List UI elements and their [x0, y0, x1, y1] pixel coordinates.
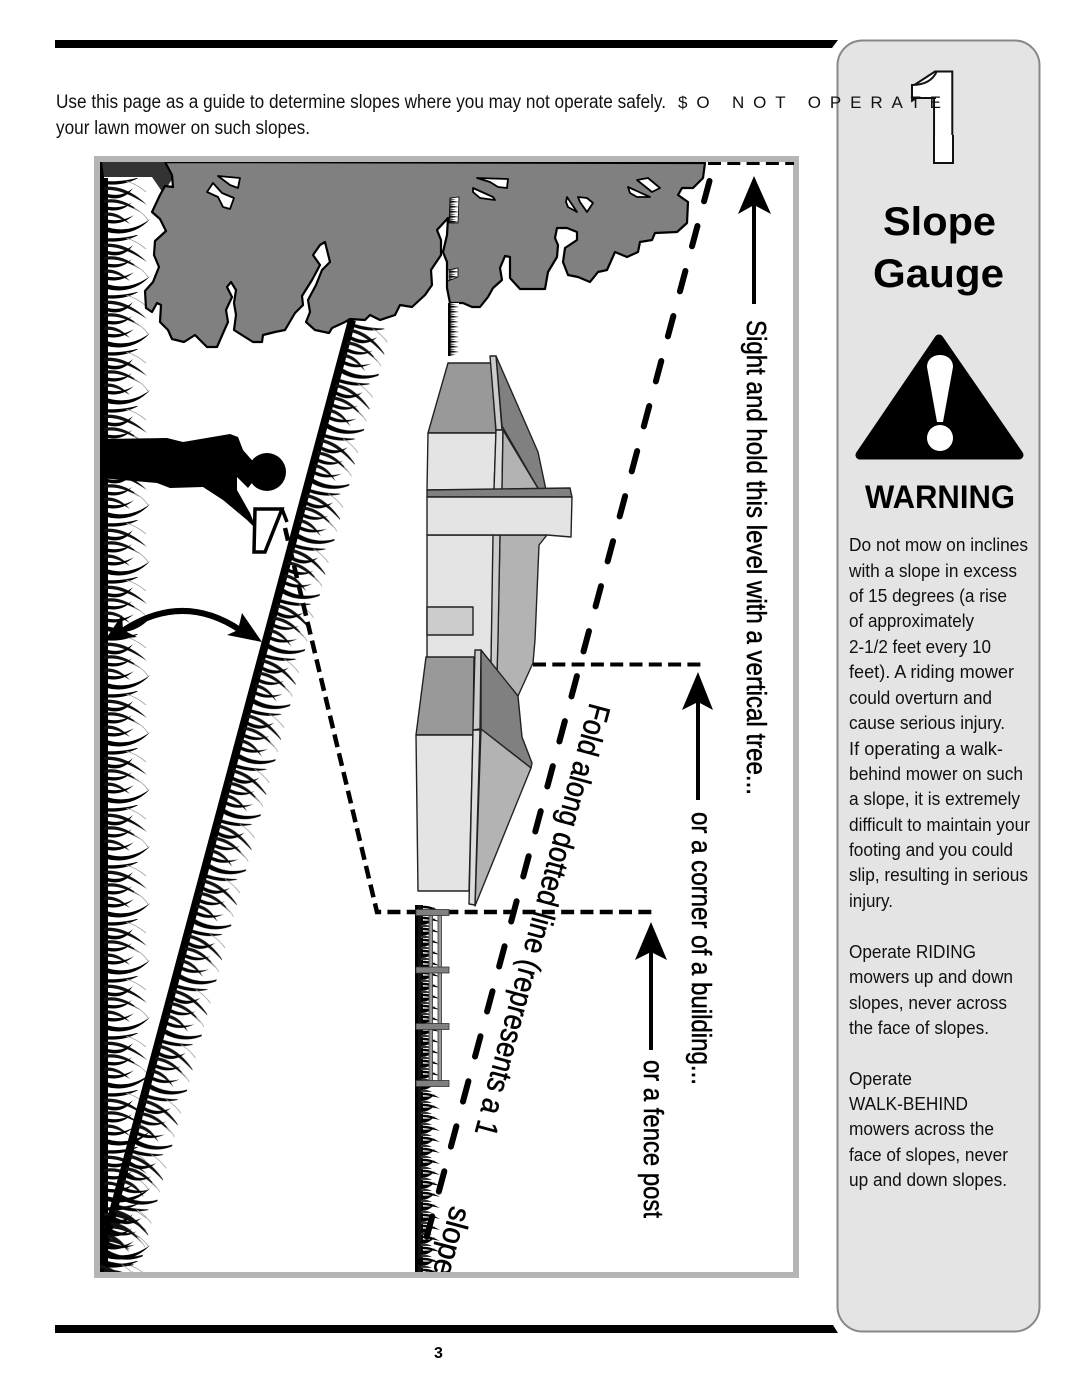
- page number: 3: [434, 1345, 443, 1362]
- sliver of grass behind tree: [448, 197, 459, 356]
- arrow: building corner: [682, 672, 713, 800]
- walk-behind mower instructions: face of slopes, never: [849, 1144, 1008, 1165]
- person silhouette: [100, 434, 286, 530]
- riding mower instructions: slopes, never across: [849, 992, 1007, 1013]
- intro text: Use this page as a guide to determine slopes where you may not operate safely.: [56, 92, 666, 113]
- numeral 1: [911, 70, 954, 164]
- icon: warning triangle: [860, 339, 1019, 455]
- left vertical reference line with grass: [100, 162, 151, 1272]
- warning label: WARNING: [865, 479, 1015, 515]
- warning text: [848, 534, 1030, 911]
- warning text: a slope, it is extremely: [849, 788, 1021, 809]
- angle arrow: [105, 611, 262, 642]
- panel: slope gauge sidebar: [838, 40, 1040, 1332]
- walk-behind mower instructions: WALK-BEHIND: [849, 1093, 968, 1114]
- dashed sight line from gauge: [285, 528, 653, 912]
- warning text: of approximately: [849, 610, 975, 631]
- warning text: slip, resulting in serious: [849, 864, 1028, 885]
- fold label: Fold along dotted line (represents a 1: [468, 700, 617, 1140]
- warning text: cause serious injury.: [849, 712, 1005, 733]
- building: front wing: [416, 650, 532, 906]
- tree gaps: [207, 176, 660, 212]
- bottom rule: [55, 1325, 838, 1333]
- sidebar heading: Gauge: [873, 252, 1004, 296]
- scene contents: [93, 162, 795, 1290]
- panel: gauge diagram frame: [93, 159, 796, 1290]
- rotated instruction labels: [424, 320, 772, 1290]
- warning text: footing and you could: [849, 839, 1013, 860]
- warning text: behind mower on such: [849, 763, 1023, 784]
- sidebar heading: Slope: [883, 200, 996, 244]
- tree canopy: [145, 162, 705, 356]
- warning text: If operating a walk-: [849, 738, 1003, 759]
- sidebar heading: [873, 200, 1004, 296]
- arrow: tree sight: [738, 176, 771, 304]
- riding mower instructions: [849, 941, 1013, 1038]
- walk-behind mower instructions: Operate: [849, 1068, 912, 1089]
- warning text: difficult to maintain your: [849, 814, 1030, 835]
- walk-behind mower instructions: [849, 1068, 1008, 1190]
- fold line dashed: [420, 181, 710, 1262]
- fence with grass: [415, 905, 449, 1272]
- riding mower instructions: Operate RIDING: [849, 941, 976, 962]
- dashed level lines: [533, 163, 795, 664]
- warning text: of 15 degrees (a rise: [849, 585, 1007, 606]
- intro text: [56, 92, 941, 139]
- rotated instruction labels: Sight and hold this level with a vertical tree...: [741, 320, 772, 795]
- numeral 1: 1: [903, 44, 977, 192]
- walk-behind mower instructions: mowers across the: [849, 1118, 994, 1139]
- warning text: feet). A riding mower: [849, 661, 1014, 682]
- fence post label: or a fence post: [638, 1060, 669, 1218]
- arrow: fence post: [635, 922, 667, 1050]
- warning text: Do not mow on inclines: [849, 534, 1028, 555]
- dark sky corner: [102, 162, 172, 190]
- building: far wing: [427, 356, 572, 696]
- riding mower instructions: mowers up and down: [849, 966, 1013, 987]
- sighting gauge held by person: [254, 509, 287, 552]
- slope label: slope): [424, 1203, 478, 1290]
- warning text: could overturn and: [849, 687, 992, 708]
- warning text: with a slope in excess: [848, 560, 1017, 581]
- sloped ground line with grass: [93, 319, 391, 1282]
- riding mower instructions: the face of slopes.: [849, 1017, 989, 1038]
- walk-behind mower instructions: up and down slopes.: [849, 1169, 1007, 1190]
- top rule: [55, 40, 838, 48]
- intro text: your lawn mower on such slopes.: [56, 118, 310, 139]
- warning text: injury.: [849, 890, 893, 911]
- warning text: 2-1/2 feet every 10: [849, 636, 991, 657]
- intro text: $O NOT OPERATE: [678, 93, 941, 112]
- corner of building label: or a corner of a building...: [686, 812, 717, 1085]
